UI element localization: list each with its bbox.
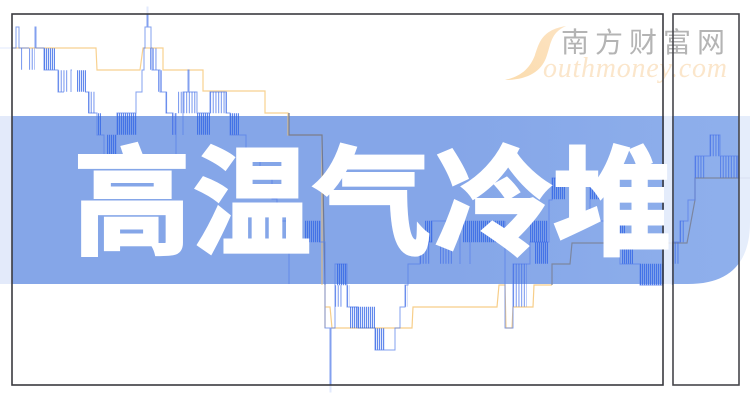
price oscillation dense	[44, 59, 663, 339]
right chart frame	[673, 14, 739, 385]
title: 高温气冷堆	[73, 139, 671, 271]
price oscillation sparse	[21, 59, 738, 296]
watermark: southmoney logo	[505, 26, 731, 84]
watermark Chinese name: 南方财富网	[561, 27, 731, 58]
moving average line	[12, 48, 322, 285]
watermark domain: outhmoney.com	[543, 53, 728, 84]
logo swoosh	[505, 26, 566, 80]
blue title band	[0, 116, 750, 284]
